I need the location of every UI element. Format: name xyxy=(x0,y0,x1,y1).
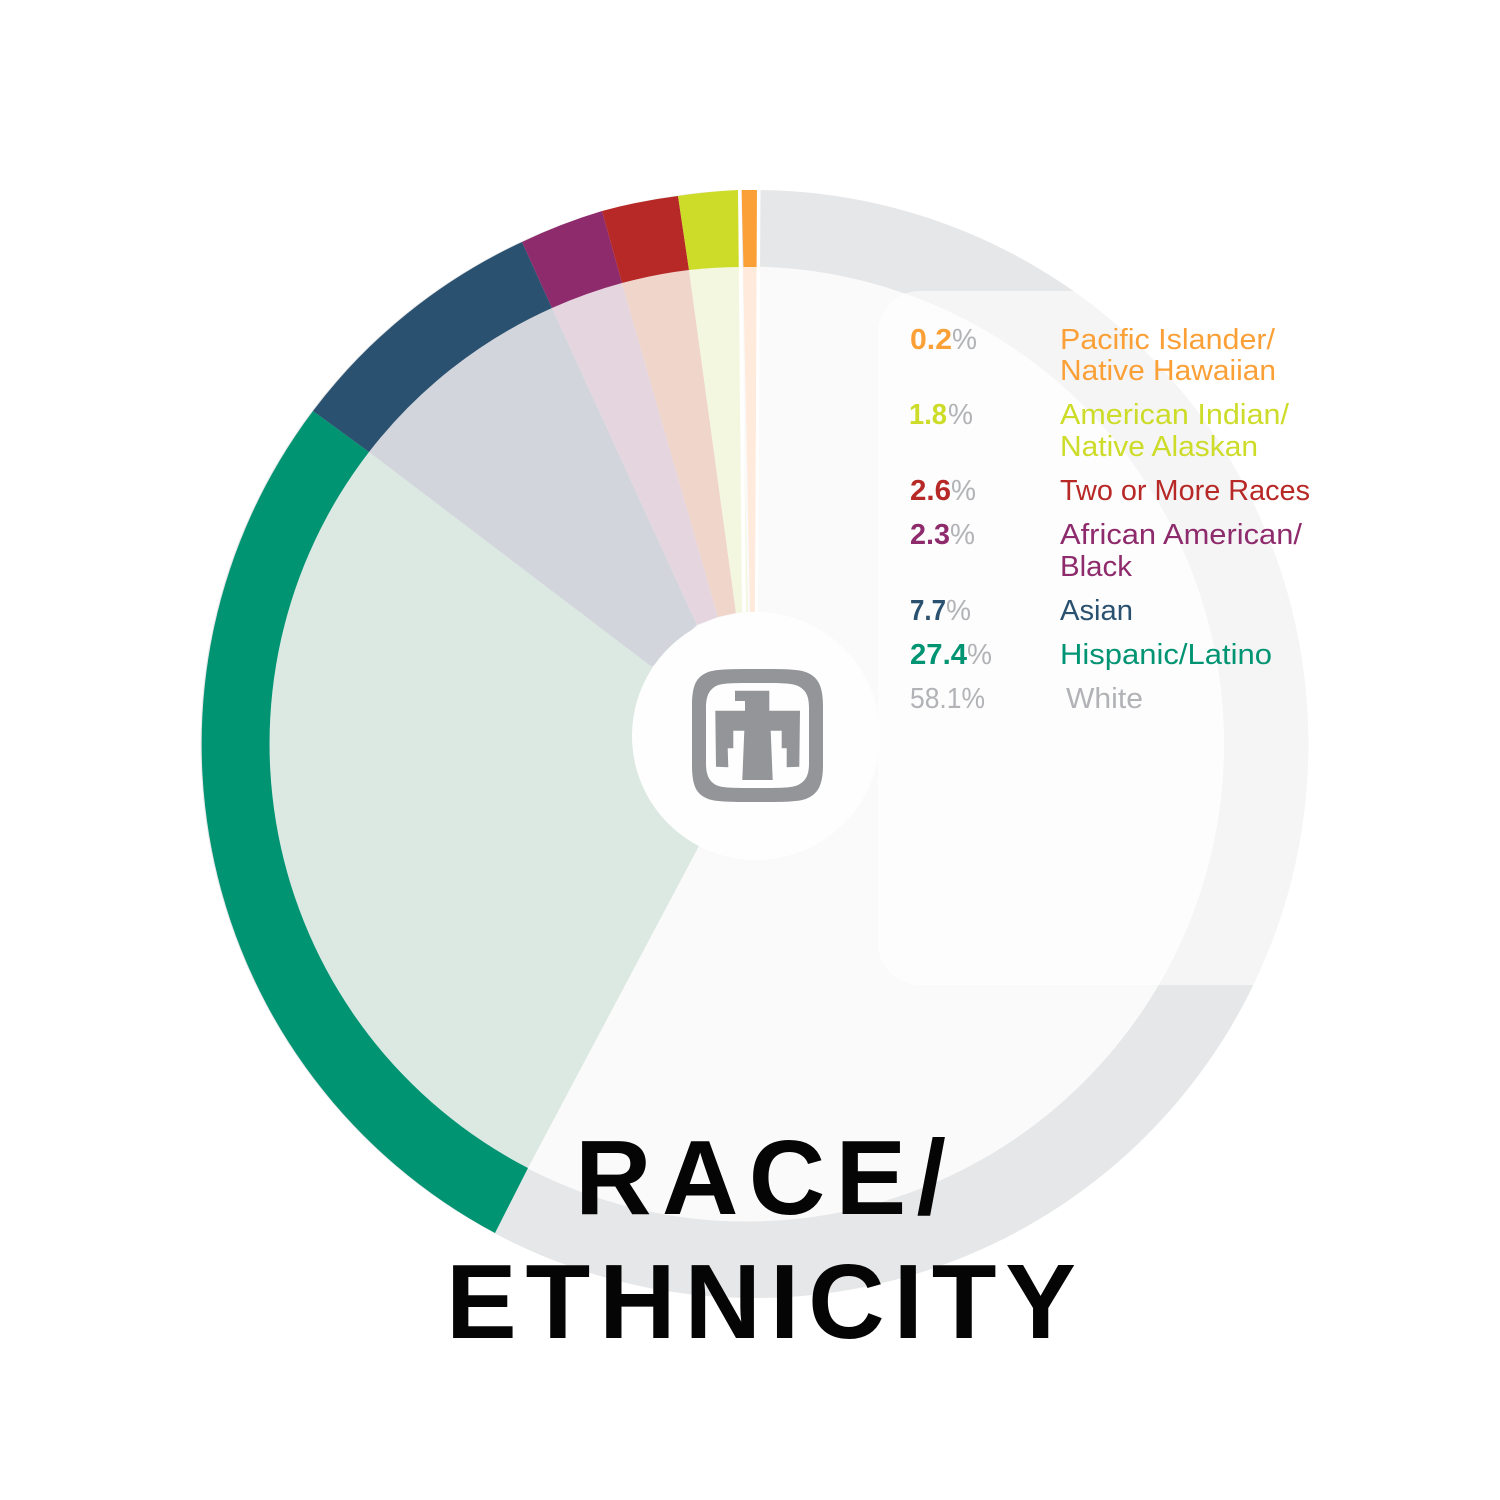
donut chart: race and ethnicity shares xyxy=(200,186,1308,1298)
legend row: Hispanic/Latino: 27.4 xyxy=(910,639,967,671)
inner sector: American Indian/Native Alaskan xyxy=(689,267,748,613)
legend row: White xyxy=(910,683,1143,715)
legend row: Asian: 7.7 xyxy=(910,595,946,627)
inner sector: Pacific Islander/Native Hawaiian xyxy=(743,267,757,612)
legend row: Two or More Races: Two or More Races xyxy=(1060,475,1310,507)
inner sector: African American/Black xyxy=(552,283,718,625)
inner sector: White xyxy=(269,266,1224,1222)
ring segment: Hispanic/Latino xyxy=(202,411,528,1233)
title xyxy=(446,1119,1076,1361)
legend row: Pacific Islander/Native Hawaiian: 0.2 xyxy=(910,324,952,356)
ring segment: Two or More Races xyxy=(602,196,689,283)
title: ETHNICITY xyxy=(446,1243,1076,1361)
legend row: African American/Black: Black xyxy=(1060,551,1132,583)
legend row: American Indian/Native Alaskan: American Indian/ xyxy=(1060,399,1290,431)
ring segment: American Indian/Native Alaskan xyxy=(678,190,740,270)
legend row: Two or More Races: 2.6 xyxy=(910,475,951,507)
legend row: Asian xyxy=(910,595,1133,627)
legend row: American Indian/Native Alaskan xyxy=(909,399,1290,463)
inner sector: Asian xyxy=(369,308,697,667)
center hub circle xyxy=(632,612,880,860)
inner sector: Two or More Races xyxy=(622,270,736,617)
legend row: African American/Black xyxy=(910,519,1303,583)
title: RACE/ xyxy=(575,1119,946,1237)
ring segment: Pacific Islander/Native Hawaiian xyxy=(742,190,757,267)
legend row: Two or More Races: % xyxy=(951,475,976,507)
legend row: Asian: % xyxy=(946,595,971,627)
legend row: Asian: Asian xyxy=(1060,595,1133,627)
legend row: Pacific Islander/Native Hawaiian: Pacific Islander/ xyxy=(1060,324,1276,356)
legend row: Hispanic/Latino xyxy=(910,639,1272,671)
legend row: Hispanic/Latino: Hispanic/Latino xyxy=(1060,639,1272,671)
legend row: American Indian/Native Alaskan: Native Alaskan xyxy=(1060,431,1258,463)
legend row: White: 58.1% xyxy=(910,683,985,715)
icon: thunderbird logo xyxy=(692,669,823,802)
legend row: Two or More Races xyxy=(910,475,1310,507)
inner sector: Hispanic/Latino xyxy=(270,452,699,1168)
legend row: American Indian/Native Alaskan: 1.8 xyxy=(909,399,947,431)
legend row: American Indian/Native Alaskan: % xyxy=(948,399,973,431)
legend row: White: White xyxy=(1066,683,1143,715)
ring segment: African American/Black xyxy=(522,211,622,308)
ring segment: White (grey track) xyxy=(200,190,1308,1298)
legend row: African American/Black: 2.3 xyxy=(910,519,950,551)
legend row: African American/Black: % xyxy=(950,519,975,551)
legend row: Pacific Islander/Native Hawaiian xyxy=(910,324,1276,387)
legend row: African American/Black: African American/ xyxy=(1060,519,1303,551)
ring segment: Asian xyxy=(313,242,552,452)
legend row: Pacific Islander/Native Hawaiian: Native Hawaiian xyxy=(1060,355,1276,387)
legend xyxy=(909,324,1310,715)
legend row: Hispanic/Latino: % xyxy=(967,639,992,671)
legend row: Pacific Islander/Native Hawaiian: % xyxy=(952,324,977,356)
legend backing panel xyxy=(878,291,1500,985)
